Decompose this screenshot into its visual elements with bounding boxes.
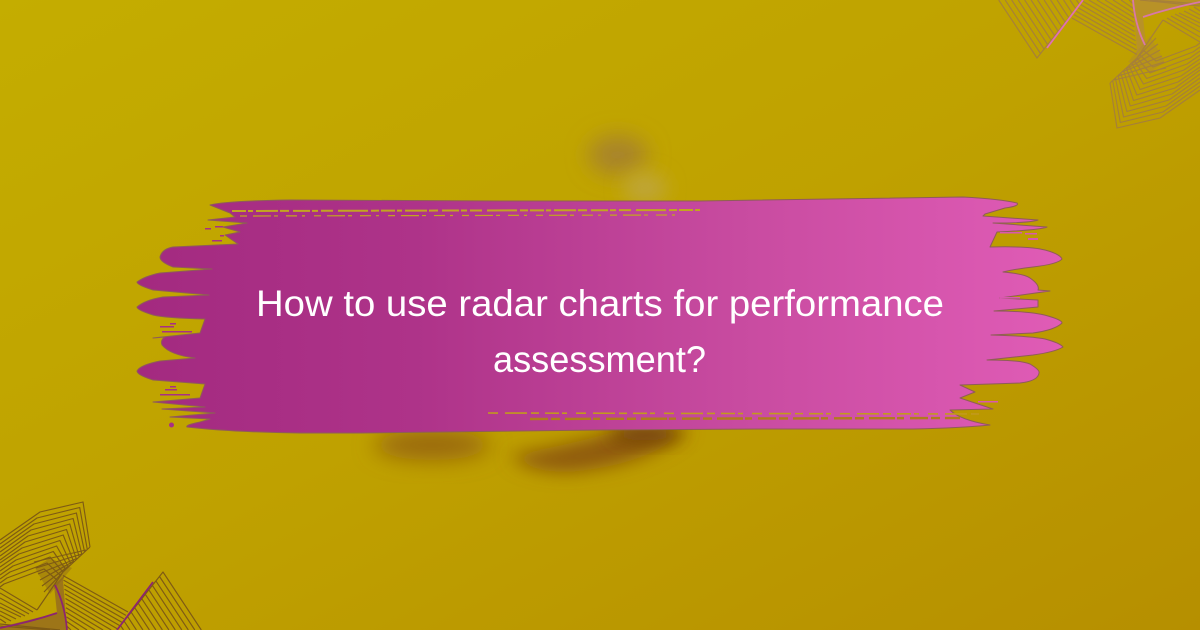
title: assessment? bbox=[493, 339, 706, 380]
brush fragments at the edges bbox=[160, 226, 1038, 428]
title bbox=[256, 283, 944, 380]
decoration: bottom-left line art bbox=[0, 502, 201, 630]
decoration: top-right line art bbox=[999, 0, 1200, 128]
title: How to use radar charts for performance bbox=[256, 283, 944, 324]
brush texture: bottom streaks bbox=[488, 413, 985, 419]
banner: pink brush stroke bbox=[137, 197, 1063, 433]
brush texture: top streaks bbox=[232, 210, 700, 216]
blurred object behind banner bbox=[374, 135, 690, 472]
